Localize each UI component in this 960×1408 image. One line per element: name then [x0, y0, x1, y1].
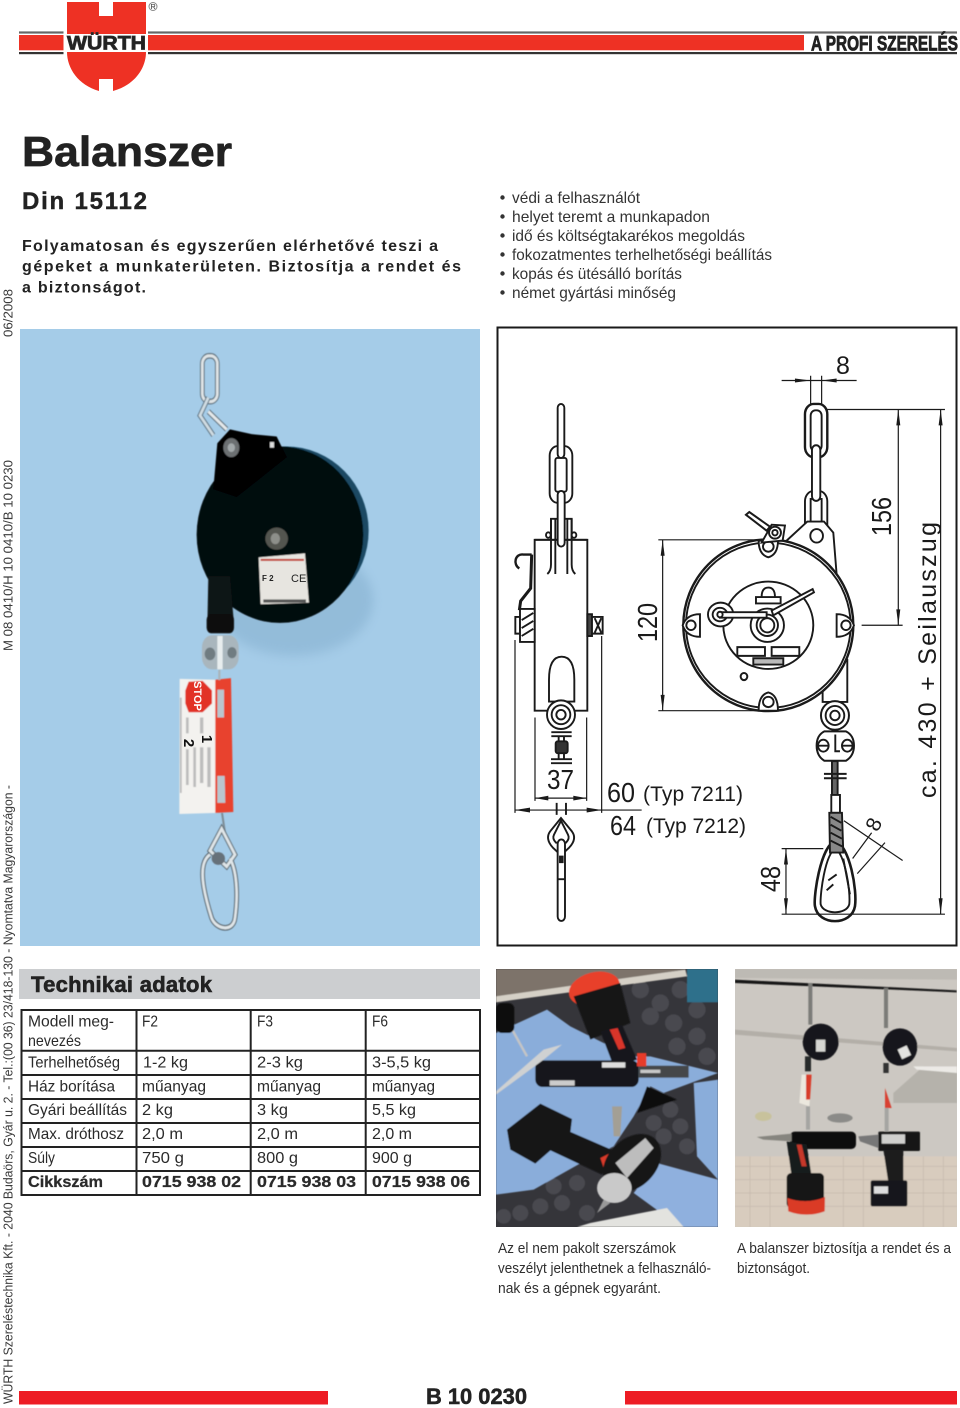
dimension labels: 64: [610, 810, 636, 841]
technical data table: 3-5,5 kg: [372, 1054, 431, 1072]
technical data table: Cikkszám: [28, 1174, 103, 1191]
tag numerals: 1: [198, 735, 215, 743]
photo: loose tools on a workbench: [496, 969, 718, 1227]
photo: tools suspended from balancers: [735, 969, 957, 1227]
feature bullet list: [500, 190, 772, 302]
technical data table: 2,0 m: [142, 1126, 183, 1143]
feature bullet list: kopás és ütésálló borítás: [512, 266, 682, 283]
logo: Würth shield: WÜRTH: [67, 34, 146, 54]
balancer right: [883, 1028, 917, 1066]
vertical imprint text: 06/2008: [0, 289, 16, 337]
feature bullet list: idő és költségtakarékos megoldás: [512, 228, 745, 245]
intro paragraph: gépeket a munkaterületen. Biztosítja a rendet és: [22, 258, 461, 276]
technical data table: F6: [372, 1014, 388, 1030]
technical data table: Súly: [28, 1150, 55, 1167]
technical data table: 2,0 m: [372, 1126, 412, 1143]
caption: left photo: veszélyt jelenthetnek a felhasználó-: [498, 1261, 711, 1277]
technical data heading: [19, 969, 480, 999]
dimension labels: [547, 352, 942, 892]
product photo: balancer on blue: [20, 329, 480, 946]
tool left: [790, 1132, 856, 1149]
footer bar left: [19, 1391, 328, 1404]
title: Balanszer: [22, 128, 232, 175]
technical data table: műanyag: [257, 1078, 321, 1096]
balancer left: [803, 1024, 839, 1060]
technical data table: Terhelhetőség: [28, 1054, 120, 1072]
feature bullet list: fokozatmentes terhelhetőségi beállítás: [512, 247, 772, 264]
caption: left photo: Az el nem pakolt szerszámok: [498, 1241, 677, 1257]
technical data table: [22, 1010, 480, 1195]
tool right: [878, 1132, 920, 1151]
tag numerals: 2: [180, 739, 197, 747]
top chain link: [200, 356, 227, 435]
caption: right photo: [737, 1241, 952, 1277]
footer bar right: [625, 1391, 957, 1404]
product label text: [262, 573, 306, 585]
feature bullet list: helyet teremt a munkapadon: [512, 209, 710, 226]
tool 1: [565, 966, 624, 1012]
dimension labels: 120: [632, 603, 663, 642]
dimension labels: 37: [547, 764, 574, 795]
dimension labels: 48: [755, 866, 786, 892]
dimension labels: (Typ 7211): [643, 783, 743, 806]
technical data table: 0715 938 06: [372, 1174, 470, 1191]
product label text: F 2: [262, 574, 274, 583]
feature bullet list: német gyártási minőség: [512, 285, 676, 302]
technical data table: 2,0 m: [257, 1126, 298, 1143]
technical data table: 1-2 kg: [143, 1054, 188, 1072]
vertical imprint text: M 08 0410/H 10 0410/B 10 0230: [0, 460, 16, 651]
warning tag: [179, 679, 217, 814]
product label text: CE: [291, 573, 306, 585]
clamp: [202, 635, 239, 669]
dimension labels: (Typ 7212): [646, 815, 746, 838]
technical data heading: Technikai adatok: [31, 972, 213, 997]
front view of balancer: [683, 404, 855, 921]
dimension drawing panel: [498, 328, 956, 946]
technical data table: műanyag: [142, 1078, 206, 1096]
technical data table: 800 g: [257, 1150, 298, 1167]
technical data table: Ház borítása: [28, 1078, 115, 1096]
cable and carabiner: [218, 670, 220, 680]
caption: right photo: biztonságot.: [737, 1261, 810, 1277]
technical data table: 0715 938 03: [257, 1174, 356, 1191]
intro paragraph: Folyamatosan és egyszerűen elérhetővé teszi a: [22, 238, 438, 255]
dimension labels: 156: [866, 497, 897, 536]
side view of balancer: [515, 404, 603, 921]
technical data table: Gyári beállítás: [28, 1102, 127, 1119]
label: [259, 553, 309, 604]
logo: Würth shield: [67, 2, 157, 91]
caption: left photo: nak és a gépnek egyaránt.: [498, 1281, 661, 1297]
technical data table: 900 g: [372, 1150, 412, 1167]
stop sign text: STOP: [191, 681, 203, 711]
technical data table: nevezés: [28, 1033, 81, 1050]
technical data table: F2: [142, 1014, 158, 1030]
caption: right photo: A balanszer biztosítja a rendet és a: [737, 1241, 952, 1257]
housing: [203, 446, 369, 615]
dimension lines: [515, 376, 945, 914]
caption: left photo: [498, 1241, 711, 1297]
technical data table: 0715 938 02: [142, 1174, 241, 1191]
tag numerals: [180, 735, 215, 747]
vertical imprint text: WÜRTH Szereléstechnika Kft. - 2040 Budaörs, Gyár u. 2. - Tel.:(00 36) 23/418-130 - Nyomtatva Magyarországon -: [0, 785, 16, 1404]
dimension labels: 60: [607, 777, 635, 808]
subtitle: Din 15112: [22, 188, 147, 215]
tool 2: [507, 1104, 572, 1164]
dimension labels: ca. 430 + Seilauszug: [914, 522, 942, 798]
header band: [19, 30, 958, 56]
technical data table: 750 g: [142, 1150, 184, 1167]
technical data table: 2-3 kg: [257, 1054, 303, 1072]
metal bar: [496, 1045, 562, 1095]
logo: Würth shield: R: [151, 4, 156, 11]
technical data table: 2 kg: [142, 1102, 173, 1119]
technical data table: Modell meg-: [28, 1014, 114, 1030]
technical data table: 3 kg: [257, 1102, 288, 1119]
technical data table: Max. dróthosz: [28, 1126, 124, 1143]
feature bullet list: védi a felhasználót: [512, 190, 641, 207]
intro paragraph: [22, 238, 461, 296]
technical data table: 5,5 kg: [372, 1102, 416, 1119]
technical data table: műanyag: [372, 1078, 435, 1096]
dimension labels: 8: [836, 352, 850, 380]
vertical imprint text: [0, 289, 16, 1404]
technical data table: F3: [257, 1014, 273, 1030]
intro paragraph: a biztonságot.: [22, 280, 146, 296]
dimension labels: 8: [861, 814, 887, 835]
